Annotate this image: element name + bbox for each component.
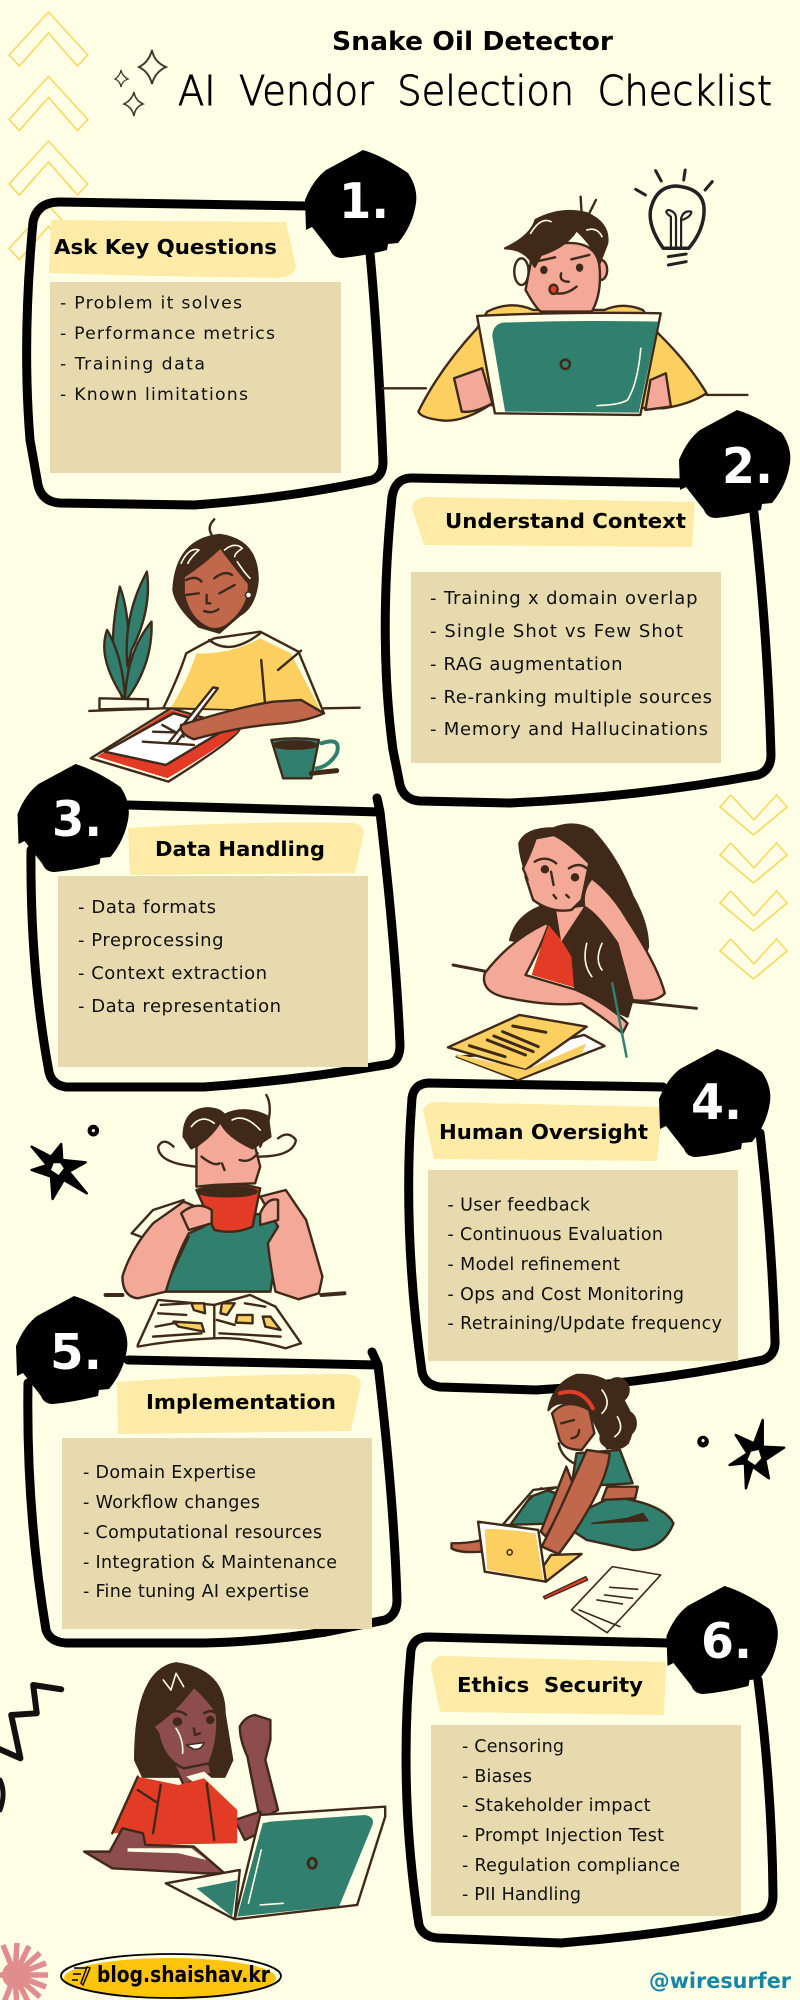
list box: - Fine tuning AI expertise — [83, 1582, 309, 1602]
list box: - Memory and Hallucinations — [430, 719, 708, 740]
title — [178, 27, 772, 115]
heading highlight and label: Data Handling — [155, 837, 325, 861]
list box: - Continuous Evaluation — [448, 1225, 663, 1245]
list box: - Performance metrics — [60, 324, 275, 344]
heading highlight and label: Understand Context — [445, 509, 686, 533]
list box: - Computational resources — [83, 1523, 322, 1543]
illustration: woman writing on tablet with plant and cup — [89, 519, 360, 782]
list box: - Re-ranking multiple sources — [430, 687, 712, 708]
decorative chevrons pointing down — [720, 795, 787, 979]
list box — [431, 1725, 741, 1916]
list box: - Integration & Maintenance — [83, 1553, 337, 1573]
panel: Ask Key Questions — [27, 150, 416, 505]
list box: - Preprocessing — [78, 930, 224, 951]
list box: - Context extraction — [78, 963, 267, 984]
title: AI Vendor Selection Checklist — [178, 67, 772, 115]
illustration: man sipping coffee with open book — [106, 1095, 344, 1348]
number badge 6 — [666, 1586, 778, 1694]
icon: pencil — [72, 1967, 90, 1985]
icon: black squiggle — [0, 1685, 61, 1810]
number badge 3: 3. — [52, 791, 102, 848]
list box: - Regulation compliance — [462, 1856, 680, 1876]
heading highlight and label — [412, 497, 695, 547]
illustration: woman waving at laptop — [84, 1663, 385, 1919]
heading highlight and label — [423, 1102, 663, 1161]
list box: - Ops and Cost Monitoring — [448, 1285, 684, 1305]
list box: - Known limitations — [60, 385, 248, 405]
heading highlight and label: Ethics Security — [457, 1673, 643, 1697]
number badge 1 — [305, 150, 416, 258]
number badge 2: 2. — [722, 438, 773, 495]
panel: Data Handling — [18, 764, 400, 1087]
list box: - Problem it solves — [60, 294, 242, 314]
heading highlight and label: Ask Key Questions — [54, 235, 277, 259]
number badge 6: 6. — [701, 1613, 752, 1670]
list box: - Training data — [60, 354, 205, 374]
icon: pink sunburst — [0, 1943, 48, 2000]
illustration: woman with curly hair on yellow laptop — [452, 1375, 673, 1633]
list box — [62, 1438, 372, 1629]
list box: - Biases — [462, 1767, 532, 1787]
list box: - Model refinement — [448, 1255, 620, 1275]
number badge 2 — [679, 410, 790, 518]
heading highlight and label — [117, 1374, 361, 1434]
list box — [50, 282, 341, 473]
list box: - Single Shot vs Few Shot — [430, 621, 683, 642]
number badge 5: 5. — [50, 1324, 102, 1381]
list box: - Prompt Injection Test — [462, 1826, 664, 1846]
blog pill — [61, 1954, 281, 1998]
panel: Ethics Security — [406, 1586, 778, 1943]
list box — [58, 876, 368, 1067]
list box: - PII Handling — [462, 1885, 581, 1905]
heading highlight and label: Implementation — [146, 1390, 336, 1414]
list box: - Stakeholder impact — [462, 1796, 651, 1816]
number badge 4: 4. — [691, 1074, 742, 1131]
icon: light bulb — [636, 170, 712, 265]
list box: - Retraining/Update frequency — [448, 1314, 722, 1334]
heading highlight and label — [128, 823, 364, 875]
social handle: @wiresurfer — [649, 1969, 792, 1993]
panel: Understand Context — [385, 410, 790, 803]
panel: Human Oversight — [409, 1049, 775, 1390]
blog pill: blog.shaishav.kr — [97, 1962, 271, 1988]
list box: - User feedback — [448, 1196, 591, 1216]
list box: - Training x domain overlap — [430, 588, 698, 609]
number badge 4 — [659, 1049, 770, 1157]
heading highlight and label — [49, 220, 296, 278]
list box: - Workflow changes — [83, 1493, 260, 1513]
title: Snake Oil Detector — [332, 27, 613, 57]
number badge 1: 1. — [339, 173, 389, 230]
icon: spiky star right with dot — [698, 1420, 784, 1488]
list box: - Censoring — [462, 1737, 564, 1757]
list box — [411, 572, 721, 763]
list box: - Domain Expertise — [83, 1463, 256, 1483]
list box: - RAG augmentation — [430, 654, 622, 675]
icon: spiky star left with dot — [32, 1126, 98, 1199]
heading highlight and label: Human Oversight — [439, 1120, 648, 1144]
list box: - Data representation — [78, 996, 281, 1017]
icon: sparkles — [115, 50, 166, 116]
number badge 3 — [18, 764, 129, 872]
panel: Implementation — [16, 1296, 397, 1643]
decorative chevrons pointing up — [9, 12, 88, 260]
list box: - Data formats — [78, 897, 216, 918]
illustration: woman thinking with papers — [448, 825, 696, 1080]
list box — [428, 1170, 738, 1361]
illustration: man at laptop — [383, 197, 747, 421]
number badge 5 — [16, 1296, 127, 1404]
heading highlight and label — [431, 1656, 666, 1715]
